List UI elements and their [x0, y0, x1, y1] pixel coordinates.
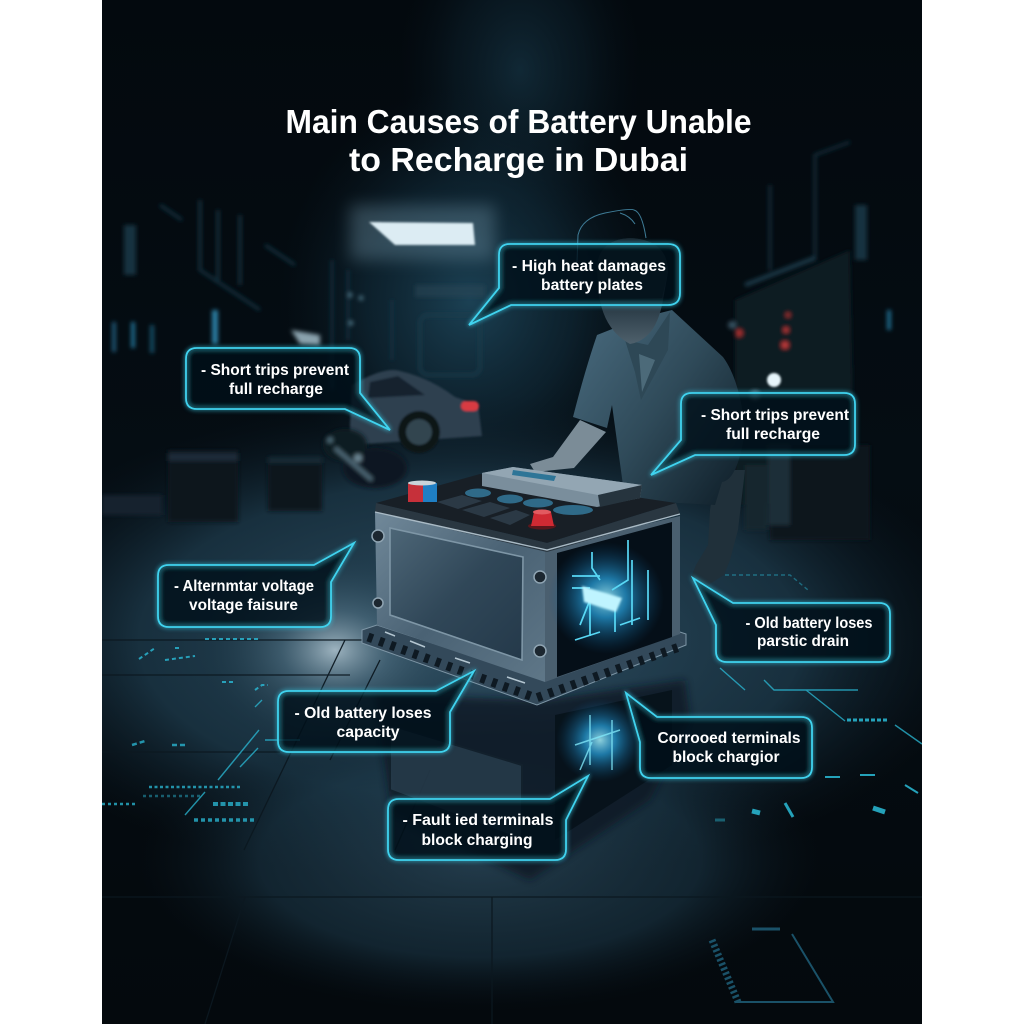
callout: old battery right	[693, 578, 890, 662]
callout: high heat	[469, 244, 680, 325]
right forearm	[690, 470, 745, 585]
front face	[375, 512, 545, 682]
bottom floor mark	[712, 929, 833, 1002]
floor tile lines	[102, 640, 922, 1024]
collar	[625, 312, 670, 400]
callout: short trips right	[651, 393, 855, 475]
callout: corroded terminals: Corrooed terminals	[658, 730, 800, 747]
technician	[530, 238, 745, 585]
callout: short trips left	[186, 348, 390, 430]
side window	[557, 522, 672, 677]
terminal: blue and red	[408, 480, 437, 502]
callout: old battery left	[278, 671, 474, 752]
callout: short trips left: full recharge	[229, 381, 323, 398]
callout: short trips left: - Short trips prevent	[201, 362, 349, 379]
title	[286, 103, 752, 178]
glowing circuitry	[556, 540, 660, 650]
torso	[573, 310, 745, 505]
indicator light	[767, 373, 781, 387]
callout: old battery right: parstic drain	[757, 633, 849, 650]
title: Main Causes of Battery Unable	[286, 103, 752, 140]
top control module	[482, 467, 642, 507]
workshop back wall	[289, 260, 483, 377]
callout: high heat: - High heat damages	[512, 258, 666, 275]
bolts	[372, 530, 546, 657]
workshop equipment right	[728, 142, 891, 540]
battery	[362, 467, 686, 705]
callout: old battery left: capacity	[336, 724, 400, 741]
floor debris	[323, 429, 407, 488]
callout: old battery right: - Old battery loses	[746, 615, 872, 632]
lid	[376, 474, 676, 543]
callout: alternator voltage	[158, 543, 354, 627]
car	[350, 370, 482, 453]
title: to Recharge in Dubai	[349, 141, 688, 178]
callout: alternator voltage: voltage faisure	[189, 597, 298, 614]
callout: corroded terminals: block chargior	[672, 749, 780, 766]
callout: old battery left: - Old battery loses	[294, 705, 432, 722]
head	[601, 282, 666, 344]
wire outline above head	[577, 209, 646, 262]
lid cells	[437, 495, 530, 525]
terminal: red	[528, 510, 556, 530]
floor circuit traces	[102, 575, 922, 820]
callout: alternator voltage: - Alternmtar voltage	[174, 578, 314, 595]
callout: faulty terminals: - Fault ied terminals	[402, 812, 554, 829]
side frame	[545, 516, 680, 682]
left forearm	[530, 420, 606, 472]
floor reflection of battery	[375, 680, 690, 880]
front inset panel	[390, 528, 523, 660]
base plate	[362, 625, 686, 705]
callout: faulty terminals	[388, 776, 588, 860]
callout: faulty terminals: block charging	[422, 832, 532, 849]
ceiling light	[350, 205, 495, 260]
callout: high heat: battery plates	[541, 277, 643, 294]
callout: short trips right: full recharge	[726, 426, 820, 443]
callout: short trips right: - Short trips prevent	[701, 407, 849, 424]
workshop shelving left	[102, 200, 322, 522]
callout: corroded terminals	[626, 693, 812, 778]
